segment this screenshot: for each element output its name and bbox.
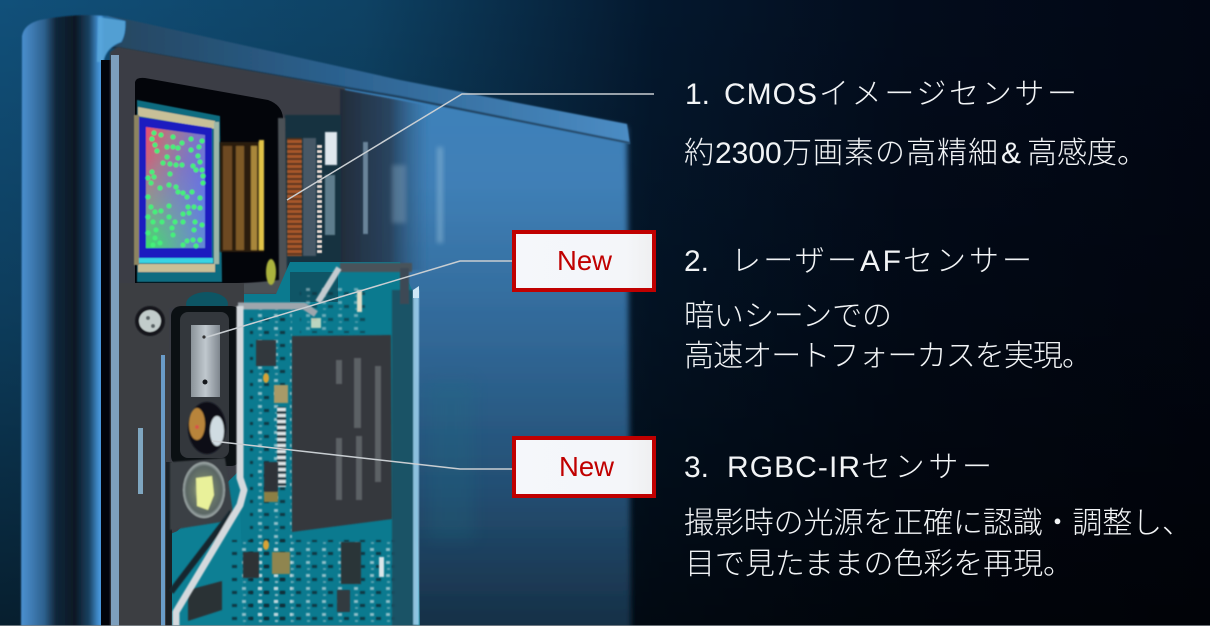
item 3 heading: RGBC-IR <box>727 451 860 484</box>
item 1 description <box>684 137 1147 170</box>
item 2 description <box>684 300 1092 373</box>
item 2 heading: 2. <box>684 245 709 278</box>
camera cavity <box>135 78 285 285</box>
item 3 heading: 3. <box>684 451 709 484</box>
image sensor <box>134 100 222 282</box>
item 1 description: & <box>1001 137 1021 170</box>
item 1 description: 万画素の高精細 <box>782 137 998 170</box>
item 1 heading <box>685 78 1077 111</box>
item 2 heading: レーザー <box>731 245 857 278</box>
module recess <box>171 306 241 466</box>
new badge 2: New <box>557 245 612 276</box>
screw <box>135 306 165 336</box>
item 1 heading: イメージセンサー <box>819 78 1077 111</box>
new badge 3 <box>514 438 654 496</box>
item 1 description: 高感度。 <box>1027 137 1147 170</box>
item 1 heading: CMOS <box>724 78 817 111</box>
silver bracket <box>171 268 339 626</box>
frame lower strip <box>119 283 244 626</box>
item 1 description: 約 <box>684 137 714 170</box>
item 3 description <box>684 507 1192 581</box>
sensor green pixels <box>146 130 206 248</box>
phone top face <box>108 16 630 144</box>
item 3 heading <box>684 451 992 484</box>
item 1 heading: 1. <box>685 78 710 111</box>
blurred rear board <box>340 89 430 270</box>
flex connector <box>220 140 276 285</box>
laser AF module <box>180 312 229 458</box>
leader line 2 <box>207 261 513 337</box>
item 2 heading: センサー <box>903 245 1032 278</box>
phone back panel <box>300 75 631 626</box>
phone left rim <box>21 15 126 626</box>
leader line 3 <box>212 441 513 469</box>
item 3 description: 目で見たままの色彩を再現。 <box>685 548 1073 581</box>
item 2 description: 高速オートフォーカスを実現。 <box>684 340 1092 373</box>
inner frame <box>110 47 345 626</box>
upper flex board <box>285 115 341 280</box>
phone illustration <box>21 15 631 626</box>
blue light bar <box>413 286 419 625</box>
grey shield arm <box>340 263 412 272</box>
sensor colour surface <box>146 127 205 248</box>
processor chip <box>292 335 392 532</box>
main circuit board <box>168 262 420 626</box>
item 2 heading <box>684 245 1032 278</box>
leader line 1 <box>287 94 654 200</box>
camera flash <box>170 458 234 530</box>
RGBC-IR sensor <box>188 402 226 454</box>
new badge 3: New <box>559 451 614 482</box>
item 3 heading: センサー <box>861 451 992 484</box>
small components <box>188 290 384 621</box>
item 1 description: 2300 <box>715 137 782 170</box>
item 2 description: 暗いシーンでの <box>684 300 892 333</box>
teal dome <box>186 292 228 316</box>
item 2 heading: AF <box>860 245 901 278</box>
new badge 2 <box>514 232 654 290</box>
item 3 description: 撮影時の光源を正確に認識・調整し、 <box>684 507 1192 540</box>
blurred board detail <box>428 380 474 540</box>
